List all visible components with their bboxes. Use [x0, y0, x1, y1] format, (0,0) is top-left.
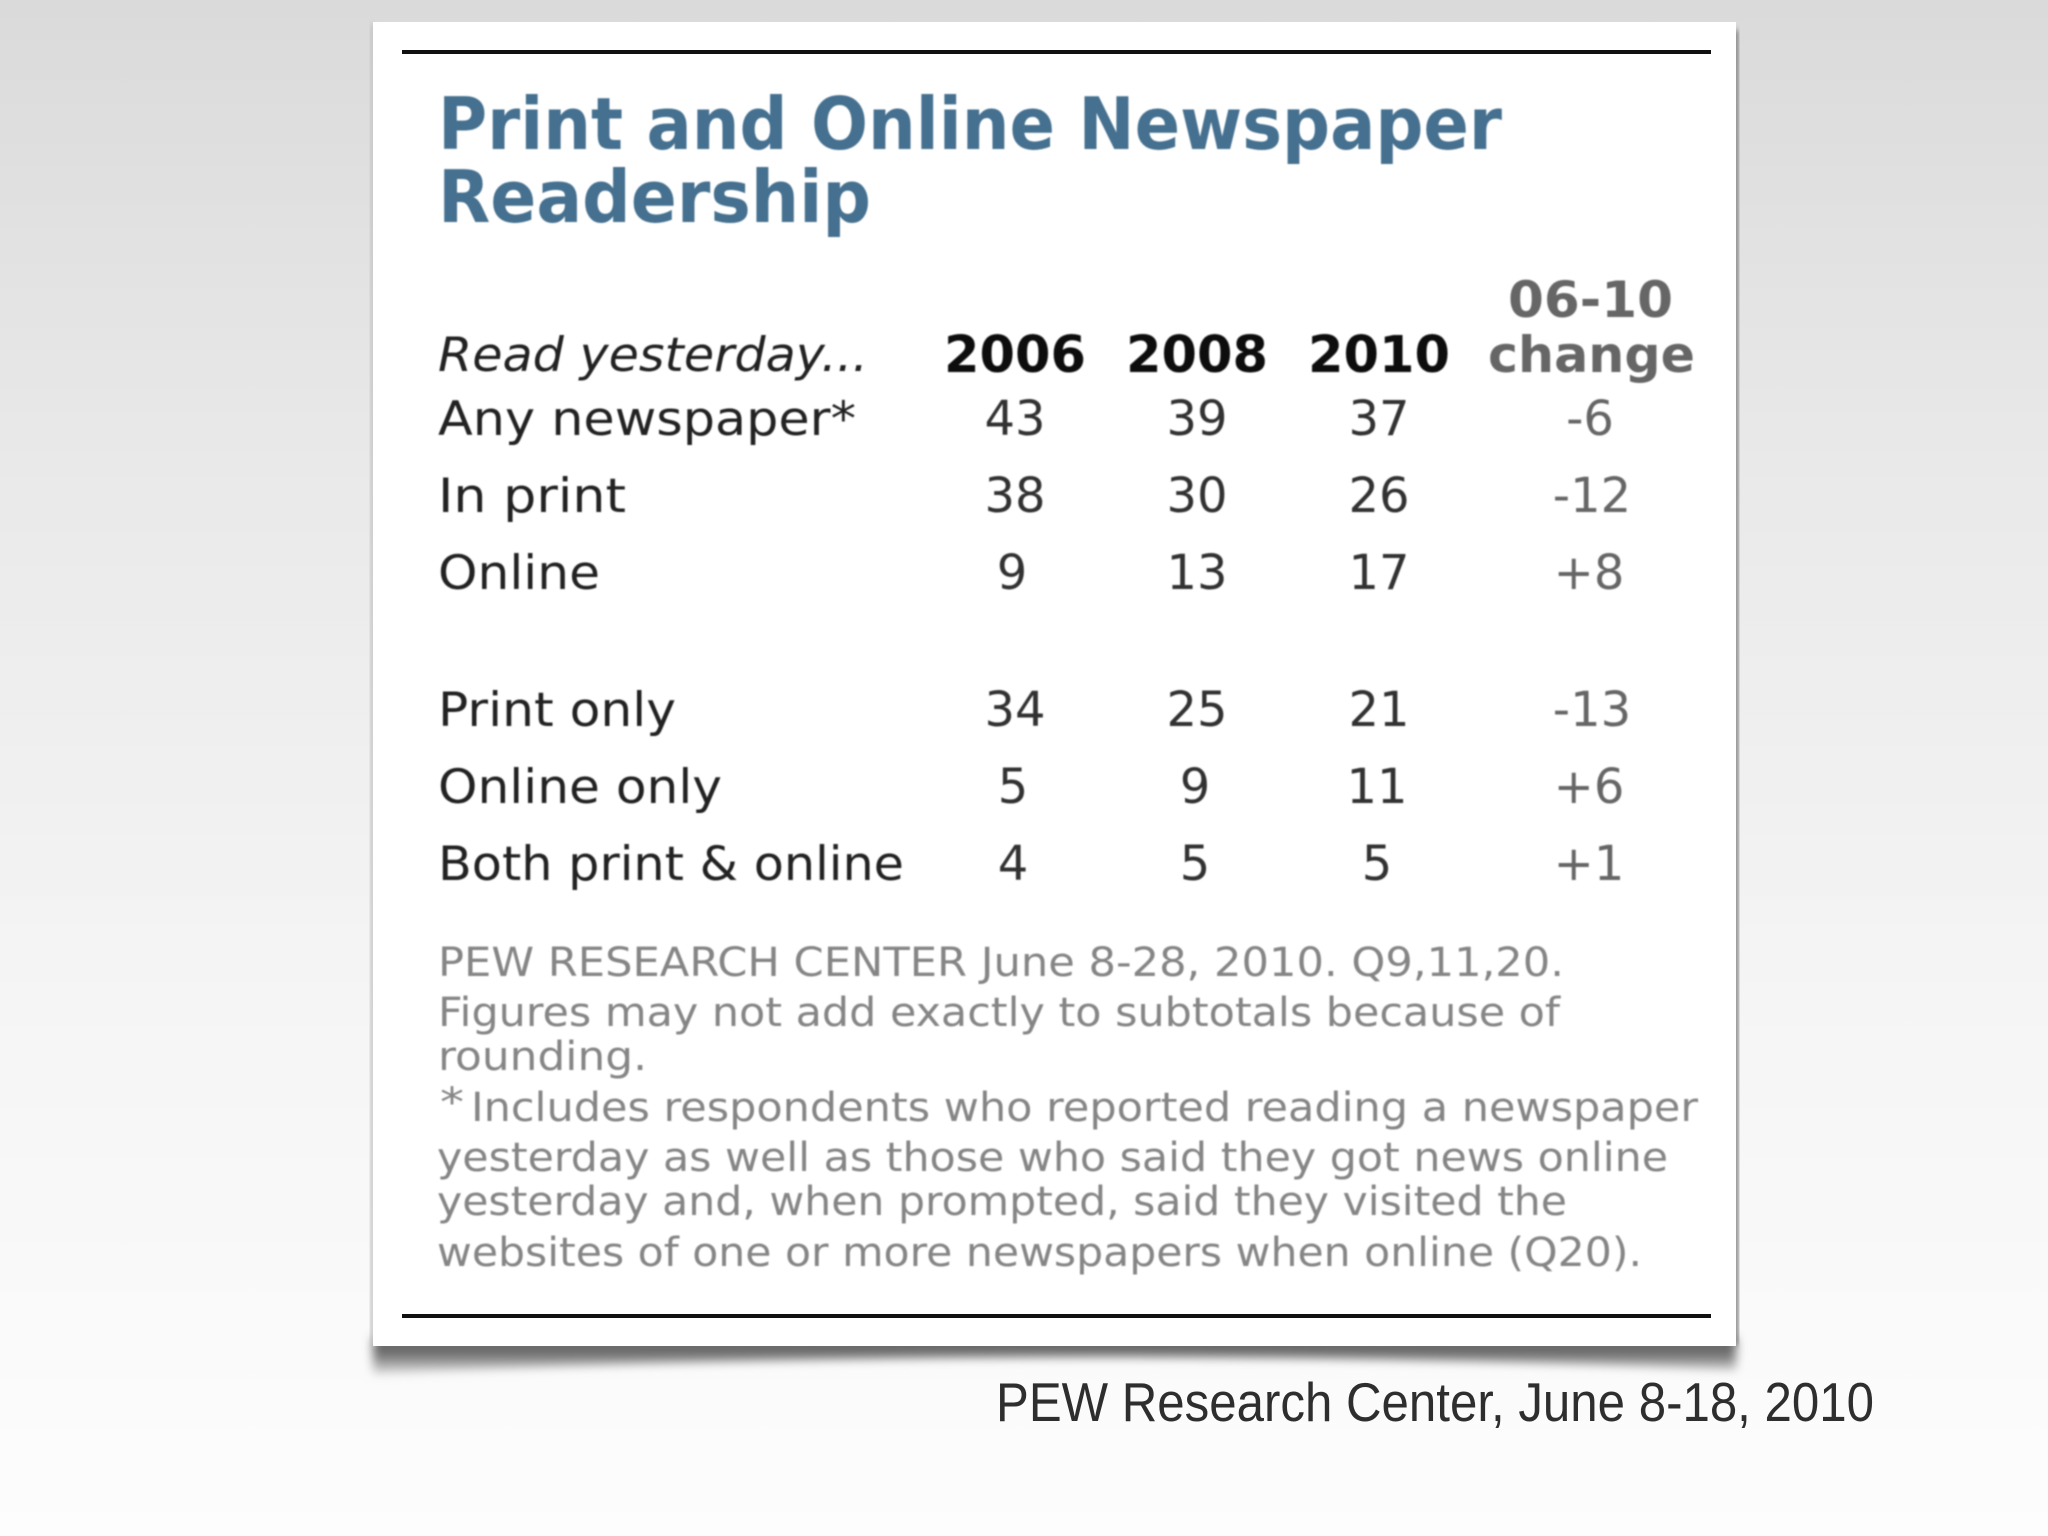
source note: Includes respondents who reported reading a newspaper — [471, 1085, 1699, 1131]
table row: both print and online: Both print & online — [438, 837, 904, 892]
table row: online only: Online only — [438, 760, 722, 815]
table header: Read yesterday... — [438, 328, 868, 383]
table row: both print and online: +1 — [1554, 836, 1624, 892]
title: Readership — [438, 155, 871, 239]
card shadow — [370, 24, 1739, 1374]
table row: in print: 38 — [984, 468, 1046, 524]
table row: any newspaper: 37 — [1348, 391, 1410, 447]
table header: change — [1488, 326, 1695, 384]
table row: in print: In print — [438, 469, 626, 524]
table row: online only — [438, 759, 1624, 815]
source note: rounding. — [438, 1034, 647, 1080]
table row: both print and online — [438, 836, 1624, 892]
table row: online: 9 — [997, 545, 1027, 601]
table row: both print and online: 5 — [1180, 836, 1210, 892]
table row: in print: 30 — [1166, 468, 1228, 524]
table row: in print — [438, 468, 1631, 524]
table row: online only: 11 — [1346, 759, 1408, 815]
table row: any newspaper: Any newspaper* — [438, 392, 856, 447]
table row: online: Online — [438, 546, 600, 601]
table header — [438, 271, 1695, 385]
table row: any newspaper: -6 — [1566, 391, 1614, 447]
table row: print only: 25 — [1166, 682, 1228, 738]
table row: print only: Print only — [438, 683, 676, 738]
table row: in print: -12 — [1553, 468, 1631, 524]
table row: print only: 34 — [984, 682, 1046, 738]
table row: print only — [438, 682, 1631, 738]
table row: both print and online: 4 — [998, 836, 1028, 892]
source note — [437, 940, 1699, 1276]
table header: 06-10 — [1508, 271, 1673, 329]
title — [438, 82, 1502, 239]
source note: yesterday and, when prompted, said they visited the — [437, 1179, 1567, 1225]
table header: 2006 — [944, 326, 1086, 385]
source note: PEW RESEARCH CENTER June 8-28, 2010. Q9,11,20. — [438, 940, 1564, 986]
panel: newspaper readership card — [373, 22, 1736, 1346]
table header: 2010 — [1308, 326, 1450, 385]
table header: 2008 — [1126, 326, 1268, 385]
caption: PEW Research Center, June 8-18, 2010 — [996, 1371, 1874, 1433]
table row: any newspaper: 43 — [984, 391, 1046, 447]
table row: print only: -13 — [1553, 682, 1631, 738]
table row: any newspaper — [438, 391, 1614, 447]
title: Print and Online Newspaper — [438, 82, 1502, 166]
source note: * — [440, 1080, 464, 1126]
table row: both print and online: 5 — [1362, 836, 1392, 892]
table row: online only: +6 — [1554, 759, 1624, 815]
table row: print only: 21 — [1348, 682, 1410, 738]
table row: online — [438, 545, 1624, 601]
table row: in print: 26 — [1348, 468, 1410, 524]
table row: any newspaper: 39 — [1166, 391, 1228, 447]
source note: websites of one or more newspapers when online (Q20). — [437, 1230, 1642, 1276]
source note: Figures may not add exactly to subtotals because of — [438, 990, 1561, 1036]
table row: online: +8 — [1554, 545, 1624, 601]
table row: online only: 9 — [1180, 759, 1210, 815]
source note: yesterday as well as those who said they got news online — [437, 1135, 1668, 1181]
table row: online: 13 — [1166, 545, 1228, 601]
table row: online: 17 — [1348, 545, 1410, 601]
table row: online only: 5 — [998, 759, 1028, 815]
